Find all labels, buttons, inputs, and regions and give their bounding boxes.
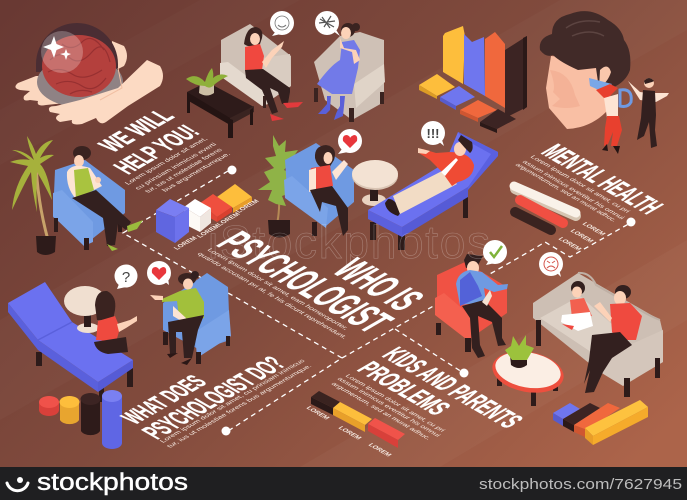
title: who is psychologist: Lorem ipsum dolor sit amet, eam homeroporter, (205, 247, 350, 331)
title: who is psychologist (195, 225, 434, 340)
speech bubble: exclamation (421, 121, 445, 146)
title: mental health: argumentumum, sed an murat adhuc. (513, 162, 618, 223)
rounded bars: mental health: LOREM (568, 228, 595, 244)
bar chart: four cubes: LOREM (235, 199, 261, 214)
front hand (49, 60, 163, 124)
title: what does psychologist do: PSYCHOLOGIST DO? (135, 352, 292, 443)
title: kids and parents: Lorem ipsum dolor sit amet, cu pri (343, 373, 446, 433)
small woman cleaning ear (589, 78, 631, 154)
woman with tablet (244, 27, 303, 121)
lying man (385, 135, 474, 216)
speech bubble: smiley (270, 11, 294, 36)
title: kids and parents: argumentum, sed an murat adhuc. (329, 381, 433, 441)
title: what does psychologist do: WHAT DOES (114, 371, 213, 428)
man with blue shirt (456, 254, 508, 358)
woman in blue dress (317, 23, 360, 120)
woman in green jacket (150, 271, 204, 365)
oval table with plant (489, 335, 567, 406)
round table left (64, 286, 106, 333)
bar chart: bottom right beams (553, 400, 648, 445)
armchair: blue with woman (284, 143, 354, 236)
speech bubble: check mark (483, 240, 507, 265)
title: what does psychologist do: Lorem ipsum dolor sit amet, cu prinsiam inimicus (159, 358, 307, 444)
title: mental health: assum inimicus evertitur his omnui (520, 159, 626, 221)
title: we will help you: HELP YOU! (107, 121, 206, 178)
title: what does psychologist do (114, 352, 314, 449)
bar chart: bottom center: LOREM (336, 425, 363, 441)
armchair: blue with woman in green (150, 271, 231, 365)
bar chart: four cubes (156, 184, 261, 251)
watermark: iStockphotos (208, 216, 490, 268)
plant and coffee table (186, 68, 254, 138)
title: mental health: Lorem ipsum dolor sit amet, cu pri (528, 154, 631, 214)
title: who is psychologist: quando accusam pri at, fe his dicunt reprehendunt. (195, 251, 349, 340)
logo icon (7, 477, 28, 491)
round table (352, 160, 398, 206)
image url: stockphotos.com/7627945 (479, 476, 682, 493)
man with vest (67, 146, 143, 251)
giant head (540, 11, 630, 129)
bar chart: top right (419, 26, 527, 133)
title: who is psychologist: PSYCHOLOGIST (206, 225, 403, 339)
floor tiles (419, 74, 516, 133)
bar labels: LOREM (173, 236, 199, 251)
title: kids and parents: assum inimicus evertitur his omnui (335, 376, 442, 438)
bar chart: bottom center: LOREM (366, 442, 393, 458)
palm plant (10, 136, 56, 255)
small man in vest (628, 78, 669, 148)
title: who is psychologist: WHO IS (322, 252, 434, 317)
title: kids and parents: KIDS AND PARENTS (375, 343, 529, 433)
armchair: beige with woman in blue dress (314, 23, 385, 122)
title: we will help you: Lorem ipsum dolor sit amet, (124, 136, 210, 186)
speech bubble: heart left (147, 261, 171, 285)
speech bubble: angry face (539, 252, 563, 277)
title: we will help you (92, 105, 233, 194)
title: kids and parents: PROBLEMS (351, 357, 457, 419)
title: kids and parents (329, 343, 529, 441)
bar labels: LOREM (304, 405, 331, 421)
woman with long hair (94, 291, 137, 354)
title: mental health (513, 140, 669, 223)
rounded bars: mental health: LOREM (556, 236, 583, 252)
speech bubble: question: ? (122, 269, 130, 286)
logo text: stockphotos (37, 469, 188, 496)
title: we will help you: cu prinsiam inimicus everti (134, 142, 219, 191)
title: what does psychologist do: tur, ius ut molestiae forens bus argumentumque. (166, 363, 314, 449)
glass dark sphere (36, 23, 118, 72)
armchair: red with man (435, 254, 508, 358)
bar chart: four cubes: LOREM (216, 212, 242, 227)
bottom bar (0, 467, 687, 500)
title: we will help you: WE WILL (92, 105, 181, 156)
bar chart: four cubes: LOREM (196, 224, 222, 239)
armchair: blue with man (53, 146, 143, 251)
tree plant (258, 135, 298, 238)
brain (42, 35, 116, 97)
title: we will help you: tur, ius ut molestiae forens (144, 147, 224, 194)
parent (584, 285, 642, 393)
speech bubble: heart (338, 129, 362, 154)
therapy couch left (8, 282, 133, 402)
cylinders chart (39, 390, 122, 449)
woman with curly hair (309, 145, 348, 236)
bar chart: bottom center (304, 391, 405, 458)
dashed connector lines (123, 166, 636, 436)
rounded bars: mental health (514, 186, 607, 252)
armchair: beige with woman (220, 24, 303, 121)
back hand (15, 41, 127, 106)
title: we will help you: bus argumentumque. (161, 151, 233, 193)
sofa with parent and child (533, 273, 663, 397)
speech bubble: question (114, 264, 138, 289)
speech bubble: exclamation: !!! (426, 126, 440, 141)
speech bubble: scribble (315, 11, 340, 36)
child (561, 281, 593, 331)
bar labels: LOREM (580, 221, 607, 237)
glass highlight (41, 31, 83, 73)
icon: brain in hands (15, 23, 163, 124)
therapy couch with man (368, 132, 498, 250)
